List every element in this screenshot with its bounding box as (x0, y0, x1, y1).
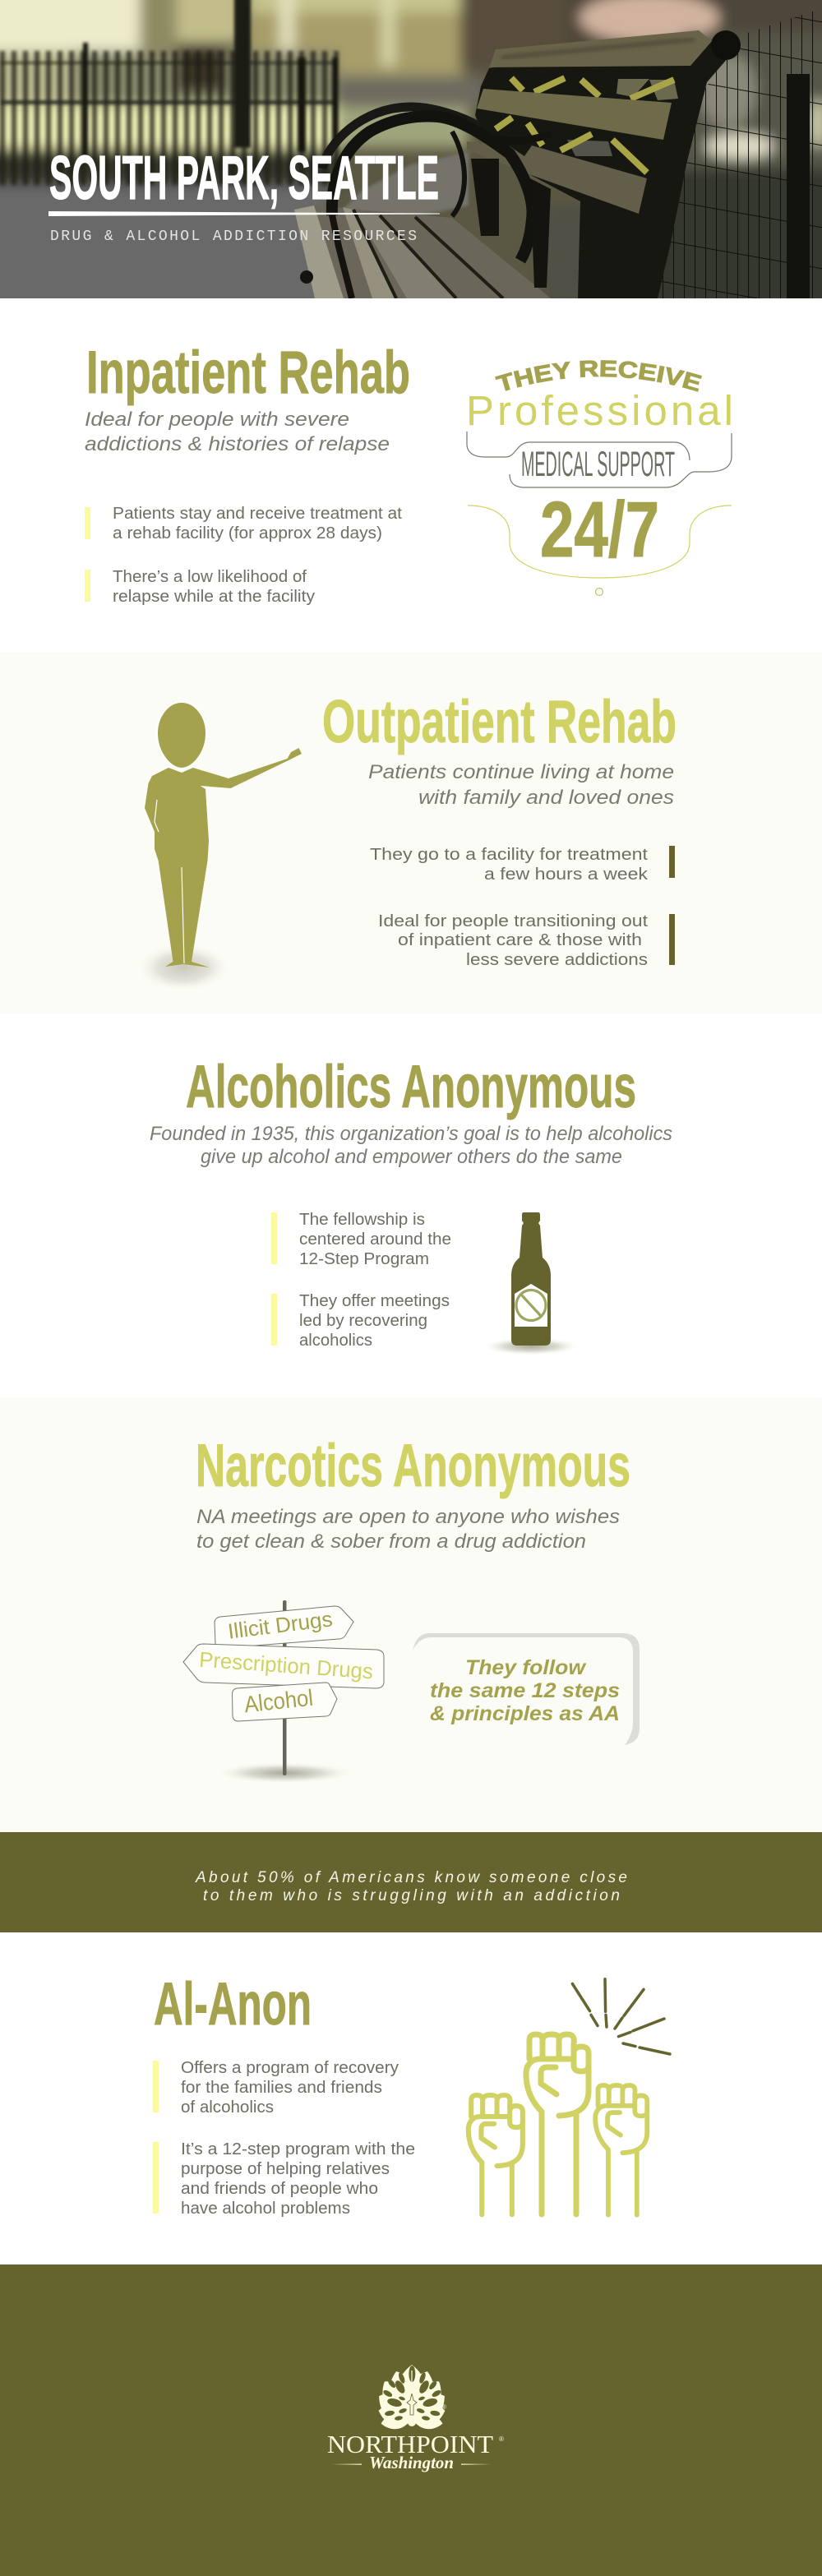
title: SOUTH PARK, SEATTLE (49, 143, 439, 212)
bullet: meetings: led by recovering (299, 1312, 427, 1330)
intro text (150, 1123, 672, 1168)
panel: alcoholics anonymous (0, 1013, 822, 1397)
header photo panel (0, 0, 822, 316)
badge small circle (595, 589, 603, 595)
sign: alcohol (232, 1683, 337, 1721)
intro text: to get clean & sober from a drug addiction (196, 1530, 586, 1553)
bullet: 12-step: The fellowship is (299, 1211, 425, 1229)
sign: illicit drugs (215, 1606, 353, 1648)
yellow struts (496, 78, 674, 173)
heading: Narcotics Anonymous (196, 1433, 630, 1499)
intro text: Patients continue living at home (368, 761, 674, 783)
intro text: give up alcohol and empower others do the same (201, 1146, 622, 1168)
signpost shadow (215, 1762, 354, 1784)
logo side lines (331, 2464, 492, 2465)
bullet: transitioning: Ideal for people transitioning out (378, 912, 649, 930)
bullet: recovery program: of alcoholics (181, 2098, 274, 2117)
bullet: transitioning: less severe addictions (466, 951, 648, 969)
bullet: transitioning: of inpatient care & those with (398, 931, 642, 949)
logo peacock fan (372, 2365, 451, 2431)
signpost pole (283, 1600, 286, 1775)
logo registered mark: ® (441, 2403, 446, 2411)
bullet: few hours (370, 846, 675, 884)
bullet: 12-step purpose: have alcohol problems (181, 2200, 350, 2218)
panel: footer (0, 2264, 822, 2576)
panel: statistic band (0, 1832, 822, 1932)
bullet: stay at facility (85, 505, 402, 542)
icon: raised fists (469, 1979, 670, 2215)
fist: left (469, 2095, 523, 2214)
bullet: 12-step (271, 1211, 451, 1268)
intro text (196, 1506, 620, 1553)
bullet: few hours: a few hours a week (484, 866, 649, 884)
logo wordmark: NORTHPOINT (327, 2430, 493, 2458)
bullet: recovery program: Offers a program of recovery (181, 2059, 399, 2077)
title rule (48, 211, 440, 216)
panel: outpatient rehab (0, 652, 822, 1013)
sign: alcohol: Alcohol (243, 1685, 314, 1717)
callout: same 12 steps: They follow (465, 1656, 587, 1679)
panel: narcotics anonymous (0, 1397, 822, 1832)
panel: statistic band: About 50% of Americans know someone close (195, 1869, 627, 1886)
grey gaps between boards (616, 79, 678, 100)
photo: park bench (0, 0, 822, 316)
callout: same 12 steps (413, 1633, 640, 1745)
bullet: low relapse (85, 568, 315, 606)
person head (157, 702, 206, 769)
bullet: stay at facility: Patients stay and receive treatment at (113, 505, 402, 523)
bullet: meetings: They offer meetings (299, 1292, 450, 1310)
callout: same 12 steps: the same 12 steps (430, 1679, 620, 1702)
blurred seat beyond arm (337, 152, 469, 218)
panel: al-anon (0, 1932, 822, 2264)
person figure (145, 748, 302, 967)
callout: same 12 steps: & principles as AA (430, 1702, 620, 1725)
bullet: recovery program: for the families and friends (181, 2079, 382, 2097)
bullet: few hours: They go to a facility for treatment (370, 846, 649, 864)
intro text (368, 761, 674, 809)
bench support (475, 30, 728, 298)
badge arc text: THEY RECEIVE (495, 360, 702, 392)
fence panel (649, 8, 822, 298)
icon: prohibited bottle (482, 1212, 580, 1355)
badge: professional medical support 24/7 (466, 360, 733, 597)
bullet: recovery program (153, 2059, 399, 2117)
subtitle: DRUG & ALCOHOL ADDICTION RESOURCES (50, 229, 417, 245)
intro text (85, 409, 390, 455)
person shadow (136, 943, 231, 992)
signpost (183, 1600, 384, 1784)
bullet: transitioning (378, 912, 675, 969)
badge lower curve (468, 506, 732, 578)
bullet: 12-step purpose (153, 2140, 415, 2218)
badge frame (467, 432, 732, 487)
bullet: meetings (271, 1292, 450, 1350)
logo wordmark registered mark: ® (499, 2435, 504, 2443)
intro text: addictions & histories of relapse (85, 433, 390, 455)
bench boards (489, 30, 712, 67)
person illustration (136, 702, 302, 992)
fist: right (595, 2085, 647, 2215)
bullet: 12-step purpose: and friends of people who (181, 2180, 378, 2198)
bullet: low relapse: relapse while at the facility (113, 588, 315, 606)
heading: Al-Anon (154, 1971, 312, 2038)
sign: illicit drugs: Illicit Drugs (226, 1606, 334, 1644)
bullet: low relapse: There’s a low likelihood of (113, 568, 307, 586)
heading: Inpatient Rehab (86, 339, 410, 406)
logo: northpoint washington (327, 2365, 504, 2472)
panel: inpatient rehab (0, 298, 822, 606)
bullet: stay at facility: a rehab facility (for approx 28 days) (113, 524, 382, 542)
fist: centre (526, 2034, 589, 2214)
panel: statistic band: to them who is struggling with an addiction (203, 1887, 620, 1904)
intro text: with family and loved ones (418, 787, 674, 809)
heading: Outpatient Rehab (322, 689, 677, 755)
bench seat (294, 205, 551, 298)
bullet: 12-step purpose: It’s a 12-step program with the (181, 2140, 415, 2158)
logo script: Washington (369, 2453, 454, 2472)
bullet: 12-step: 12-Step Program (299, 1250, 429, 1268)
intro text: NA meetings are open to anyone who wishes (196, 1506, 620, 1528)
sign: prescription drugs: Prescription Drugs (198, 1647, 374, 1683)
burst rays (572, 1979, 670, 2054)
badge word professional: Professional (466, 387, 733, 434)
intro text: Ideal for people with severe (85, 409, 349, 431)
bullet: 12-step: centered around the (299, 1230, 451, 1249)
badge 24/7: 24/7 (540, 486, 659, 574)
intro text: Founded in 1935, this organization’s goal is to help alcoholics (150, 1123, 672, 1145)
bullet: meetings: alcoholics (299, 1332, 372, 1350)
bullet: 12-step purpose: purpose of helping relatives (181, 2160, 390, 2178)
iron arm (322, 107, 481, 169)
